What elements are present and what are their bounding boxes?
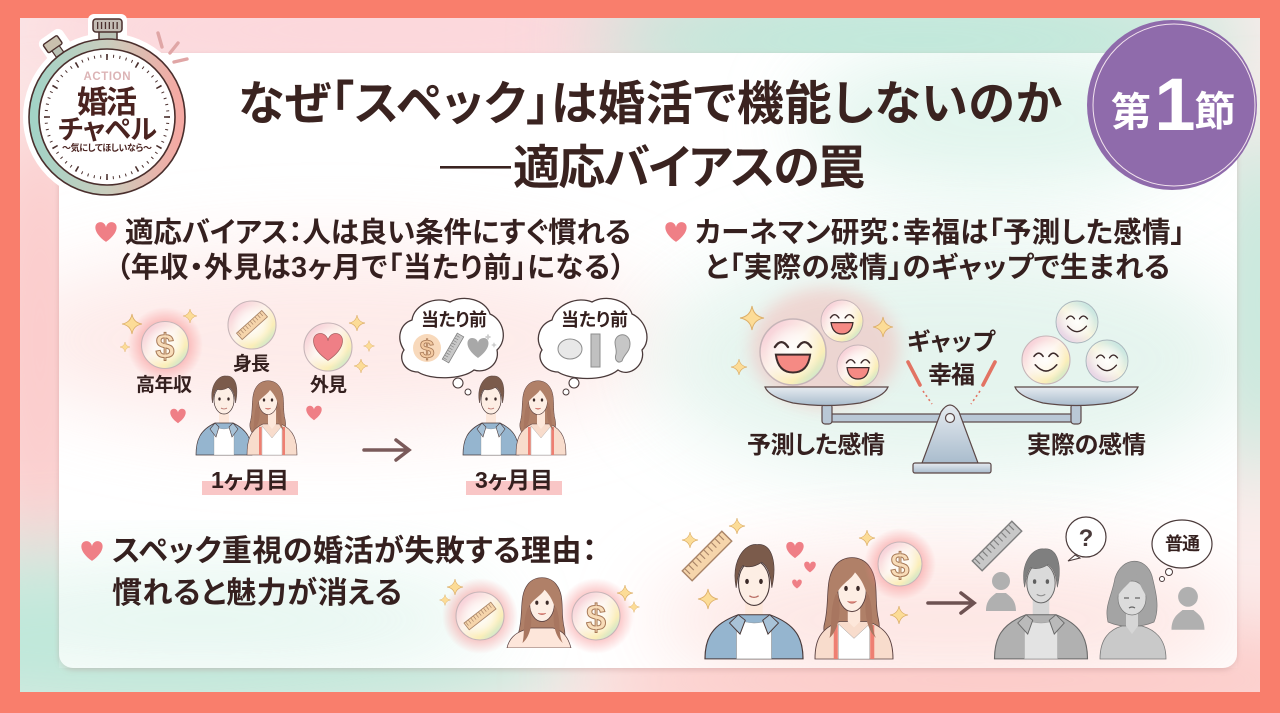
- label: month 3: 3ヶ月目: [475, 467, 553, 493]
- illustration: faded couple: [972, 517, 1212, 659]
- thought bubble: left: [400, 298, 503, 395]
- illustration: bright couple with specs: $: [891, 547, 910, 585]
- section: Kahneman heading: [665, 217, 1185, 284]
- thought bubble: right: 当たり前: [561, 310, 628, 330]
- icon: stopwatch logo: チャペル: [58, 115, 157, 145]
- title: 適応バイアスの罠: [513, 141, 865, 194]
- gap happiness label: 幸福: [928, 362, 975, 389]
- illustration: bright couple with specs: [682, 518, 936, 659]
- couple: month 3: [463, 376, 566, 455]
- badge: section 1: 節: [1194, 89, 1236, 135]
- gray woman with bob hair: [1100, 561, 1166, 659]
- illustration: woman with bubbles: [440, 578, 640, 654]
- thought bubble: right: [538, 298, 647, 395]
- illustration: month 3: [400, 298, 647, 495]
- icon: looks bubble: [304, 315, 374, 373]
- label: month 1: 1ヶ月目: [211, 467, 289, 493]
- speech bubble: question: ?: [1079, 525, 1093, 552]
- section: adaptation bias heading: （年収・外見は3ヶ月で「当たり前」になる）: [116, 252, 625, 284]
- thought bubble: ordinary: [1152, 520, 1212, 582]
- illustration: month 1: 身長: [233, 353, 270, 375]
- icon: stopwatch logo: [23, 14, 191, 201]
- title: なぜ「スペック」は婚活で機能しないのか: [238, 77, 1062, 130]
- thought bubble: left: 当たり前: [421, 310, 487, 330]
- gap happiness label: ギャップ: [907, 329, 996, 356]
- icon: stopwatch logo: 〜気にしてほしいなら〜: [62, 142, 152, 153]
- section: why spec-focused fails heading: [81, 534, 597, 610]
- thought bubble: left: $: [420, 334, 435, 364]
- thought bubble: ordinary: 普通: [1165, 534, 1200, 554]
- illustration: month 1: [120, 301, 374, 495]
- scale body: [765, 387, 1138, 473]
- title: [238, 77, 1062, 194]
- arrow: month 1 to month 3: [364, 440, 409, 460]
- section: adaptation bias heading: 適応バイアス：人は良い条件にすぐ慣れる: [125, 217, 631, 249]
- illustration: month 1: 外見: [310, 374, 347, 396]
- icon: income bubble: $: [156, 328, 175, 366]
- speech bubble: question: [1066, 517, 1106, 561]
- illustration: month 1: 高年収: [136, 373, 192, 396]
- balance scale chart: [731, 288, 1146, 473]
- illustration: woman with bubbles: $: [586, 597, 606, 638]
- section: Kahneman heading: と「実際の感情」のギャップで生まれる: [705, 252, 1170, 284]
- section: why spec-focused fails heading: 慣れると魅力が消える: [112, 576, 402, 610]
- section: adaptation bias heading: [95, 217, 631, 284]
- icon: income bubble: [120, 307, 203, 383]
- gap happiness label: [907, 329, 996, 404]
- badge: section 1: 第: [1111, 91, 1151, 135]
- icon: height bubble: [228, 301, 276, 349]
- balance scale chart: 実際の感情: [1027, 432, 1146, 459]
- balance scale chart: 予測した感情: [747, 432, 885, 459]
- icon: stopwatch logo: ACTION: [84, 71, 130, 83]
- couple: month 1: [196, 376, 297, 455]
- actual emotion bubbles: [1022, 301, 1128, 384]
- predicted emotion bubbles: [731, 288, 899, 408]
- arrow: bright to gray: [928, 593, 974, 613]
- badge: section 1: 1: [1154, 63, 1196, 146]
- icon: stopwatch logo: 婚活: [77, 85, 137, 120]
- badge: section 1: [1087, 20, 1257, 190]
- section: why spec-focused fails heading: スペック重視の婚活が失敗する理由：: [112, 534, 597, 568]
- section: Kahneman heading: カーネマン研究：幸福は「予測した感情」: [695, 217, 1185, 249]
